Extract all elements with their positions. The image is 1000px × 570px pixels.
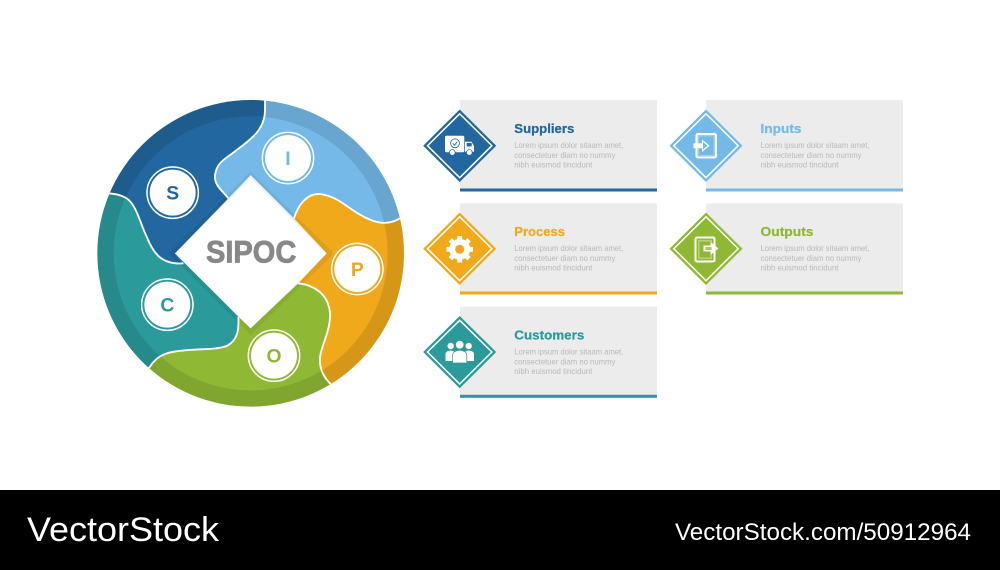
text block: Inputs: nibh euismod tincidunt	[760, 160, 839, 170]
badge C: C	[160, 296, 174, 317]
segment: Customers	[97, 194, 238, 368]
text block: Process: consectetuer diam no nummy	[514, 254, 616, 263]
panel: Suppliers	[423, 100, 657, 192]
text block: Inputs	[760, 141, 870, 170]
text block: Outputs: Lorem ipsum dolor sitaam amet,	[760, 244, 870, 253]
segment: Suppliers	[110, 100, 265, 263]
text block: Outputs: nibh euismod tincidunt	[760, 264, 839, 272]
panel: Outputs	[670, 204, 903, 294]
badge P: P	[351, 260, 364, 281]
badge I	[262, 132, 314, 184]
heading: Process: Process	[514, 225, 565, 239]
text block: Process: nibh euismod tincidunt	[514, 264, 593, 272]
text block: Customers: nibh euismod tincidunt	[514, 367, 593, 376]
text block: Customers: Lorem ipsum dolor sitaam amet,	[514, 348, 623, 356]
icon: enter door	[670, 110, 742, 182]
heading: Suppliers: Suppliers	[514, 122, 574, 136]
segment: Inputs	[216, 100, 400, 222]
SIPOC wheel diagram	[97, 100, 404, 407]
footer logo text: VectorStock	[27, 511, 220, 549]
text block: Suppliers: nibh euismod tincidunt	[514, 160, 593, 170]
text block: Inputs: Lorem ipsum dolor sitaam amet,	[760, 141, 870, 150]
center diamond	[175, 178, 327, 328]
footer bar	[0, 490, 1000, 570]
text block: Process	[514, 244, 623, 272]
icon: gear	[423, 212, 496, 285]
segment: Outputs	[149, 283, 330, 407]
text block: Outputs	[760, 244, 870, 272]
diamond shadow	[168, 172, 334, 335]
segment: Process	[294, 194, 404, 384]
text block: Inputs: consectetuer diam no nummy	[760, 151, 862, 160]
panel: Process	[423, 204, 657, 294]
badge P	[332, 243, 383, 295]
segment dividers	[105, 97, 403, 387]
badge O: O	[266, 347, 282, 368]
text block: Outputs: consectetuer diam no nummy	[760, 254, 862, 263]
text block: Suppliers: consectetuer diam no nummy	[514, 151, 616, 160]
badge S: S	[166, 184, 179, 205]
panel: Customers	[423, 306, 657, 398]
badge I: I	[285, 149, 291, 170]
icon: people group	[423, 316, 496, 388]
text block: Suppliers	[514, 141, 623, 170]
heading: Customers: Customers	[514, 328, 584, 342]
badge O	[248, 330, 300, 381]
heading: Inputs: Inputs	[760, 122, 802, 136]
icon: delivery truck	[423, 110, 496, 182]
text block: Customers: consectetuer diam no nummy	[514, 358, 616, 366]
footer image id: VectorStock.com/50912964	[675, 519, 971, 546]
center title: SIPOC	[206, 233, 296, 269]
text block: Suppliers: Lorem ipsum dolor sitaam amet,	[514, 141, 623, 150]
badge C	[142, 279, 193, 330]
badge S	[147, 167, 198, 218]
heading: Outputs: Outputs	[760, 225, 814, 239]
icon: exit door	[670, 212, 742, 285]
text block: Process: Lorem ipsum dolor sitaam amet,	[514, 244, 623, 253]
outer darker ring	[105, 108, 396, 399]
text block: Customers	[514, 348, 623, 376]
panel: Inputs	[670, 100, 903, 192]
